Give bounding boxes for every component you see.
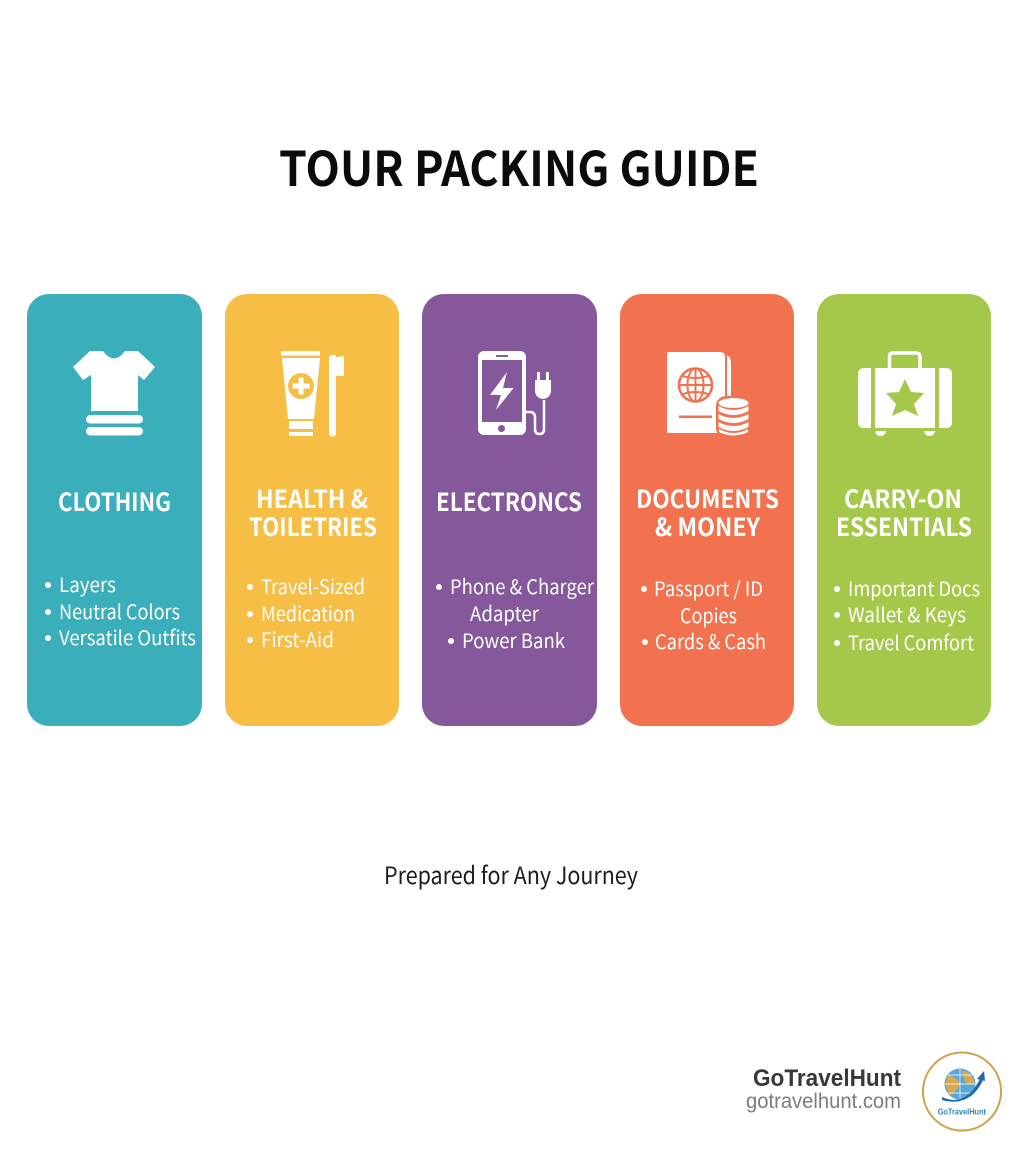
heading: health and toiletries	[249, 480, 377, 544]
logo badge	[923, 1052, 1001, 1130]
title: TOUR PACKING GUIDE	[279, 130, 759, 200]
list: electronics: Adapter	[470, 598, 539, 627]
panel: documents and money	[620, 294, 794, 726]
list: clothing	[45, 569, 196, 651]
list: carry-on essentials: Wallet & Keys	[848, 599, 966, 628]
list: clothing: Layers	[59, 569, 116, 598]
heading: carry-on essentials	[836, 480, 972, 544]
list: documents and money: Passport / ID	[654, 573, 763, 602]
heading: carry-on essentials: ESSENTIALS	[836, 508, 972, 544]
heading: electronics: ELECTRONCS	[436, 483, 582, 519]
heading: documents and money: DOCUMENTS	[636, 480, 779, 516]
list: clothing: Versatile Outfits	[59, 622, 196, 651]
panel: carry-on essentials	[817, 294, 991, 726]
heading: health and toiletries: HEALTH &	[256, 480, 368, 516]
list: documents and money	[641, 573, 766, 655]
icon: t-shirt	[73, 351, 155, 436]
list: carry-on essentials: Travel Comfort	[848, 627, 974, 656]
icon: toothpaste and toothbrush	[281, 351, 344, 436]
tagline: Prepared for Any Journey	[384, 856, 638, 891]
icon: phone with charger	[478, 351, 551, 435]
heading: documents and money	[636, 480, 779, 544]
list: health and toiletries: First-Aid	[261, 624, 334, 653]
list: electronics: Power Bank	[462, 625, 565, 654]
list: electronics: Phone & Charger	[450, 571, 594, 600]
list: documents and money: Copies	[680, 600, 737, 629]
list: health and toiletries: Medication	[261, 598, 355, 627]
panel: health and toiletries	[225, 294, 399, 726]
list: clothing: Neutral Colors	[59, 596, 180, 625]
heading: documents and money: & MONEY	[655, 508, 760, 544]
list: health and toiletries: Travel-Sized	[261, 571, 365, 600]
brand name: GoTravelHunt	[753, 1065, 901, 1092]
list: carry-on essentials	[834, 573, 980, 656]
brand url: gotravelhunt.com	[746, 1090, 901, 1113]
logo wordmark: GoTravelHunt	[938, 1108, 986, 1116]
panel: electronics	[422, 294, 597, 726]
icon: globe with plane	[942, 1068, 985, 1102]
icon: suitcase with star	[858, 353, 952, 436]
list: electronics	[436, 571, 594, 654]
heading: carry-on essentials: CARRY-ON	[844, 480, 962, 516]
list: documents and money: Cards & Cash	[655, 626, 766, 655]
icon: passport and coins	[667, 352, 752, 438]
list: health and toiletries	[247, 571, 365, 653]
heading: clothing: CLOTHING	[58, 483, 171, 519]
heading: health and toiletries: TOILETRIES	[249, 508, 377, 544]
panel: clothing	[27, 294, 202, 726]
list: carry-on essentials: Important Docs	[848, 573, 980, 602]
